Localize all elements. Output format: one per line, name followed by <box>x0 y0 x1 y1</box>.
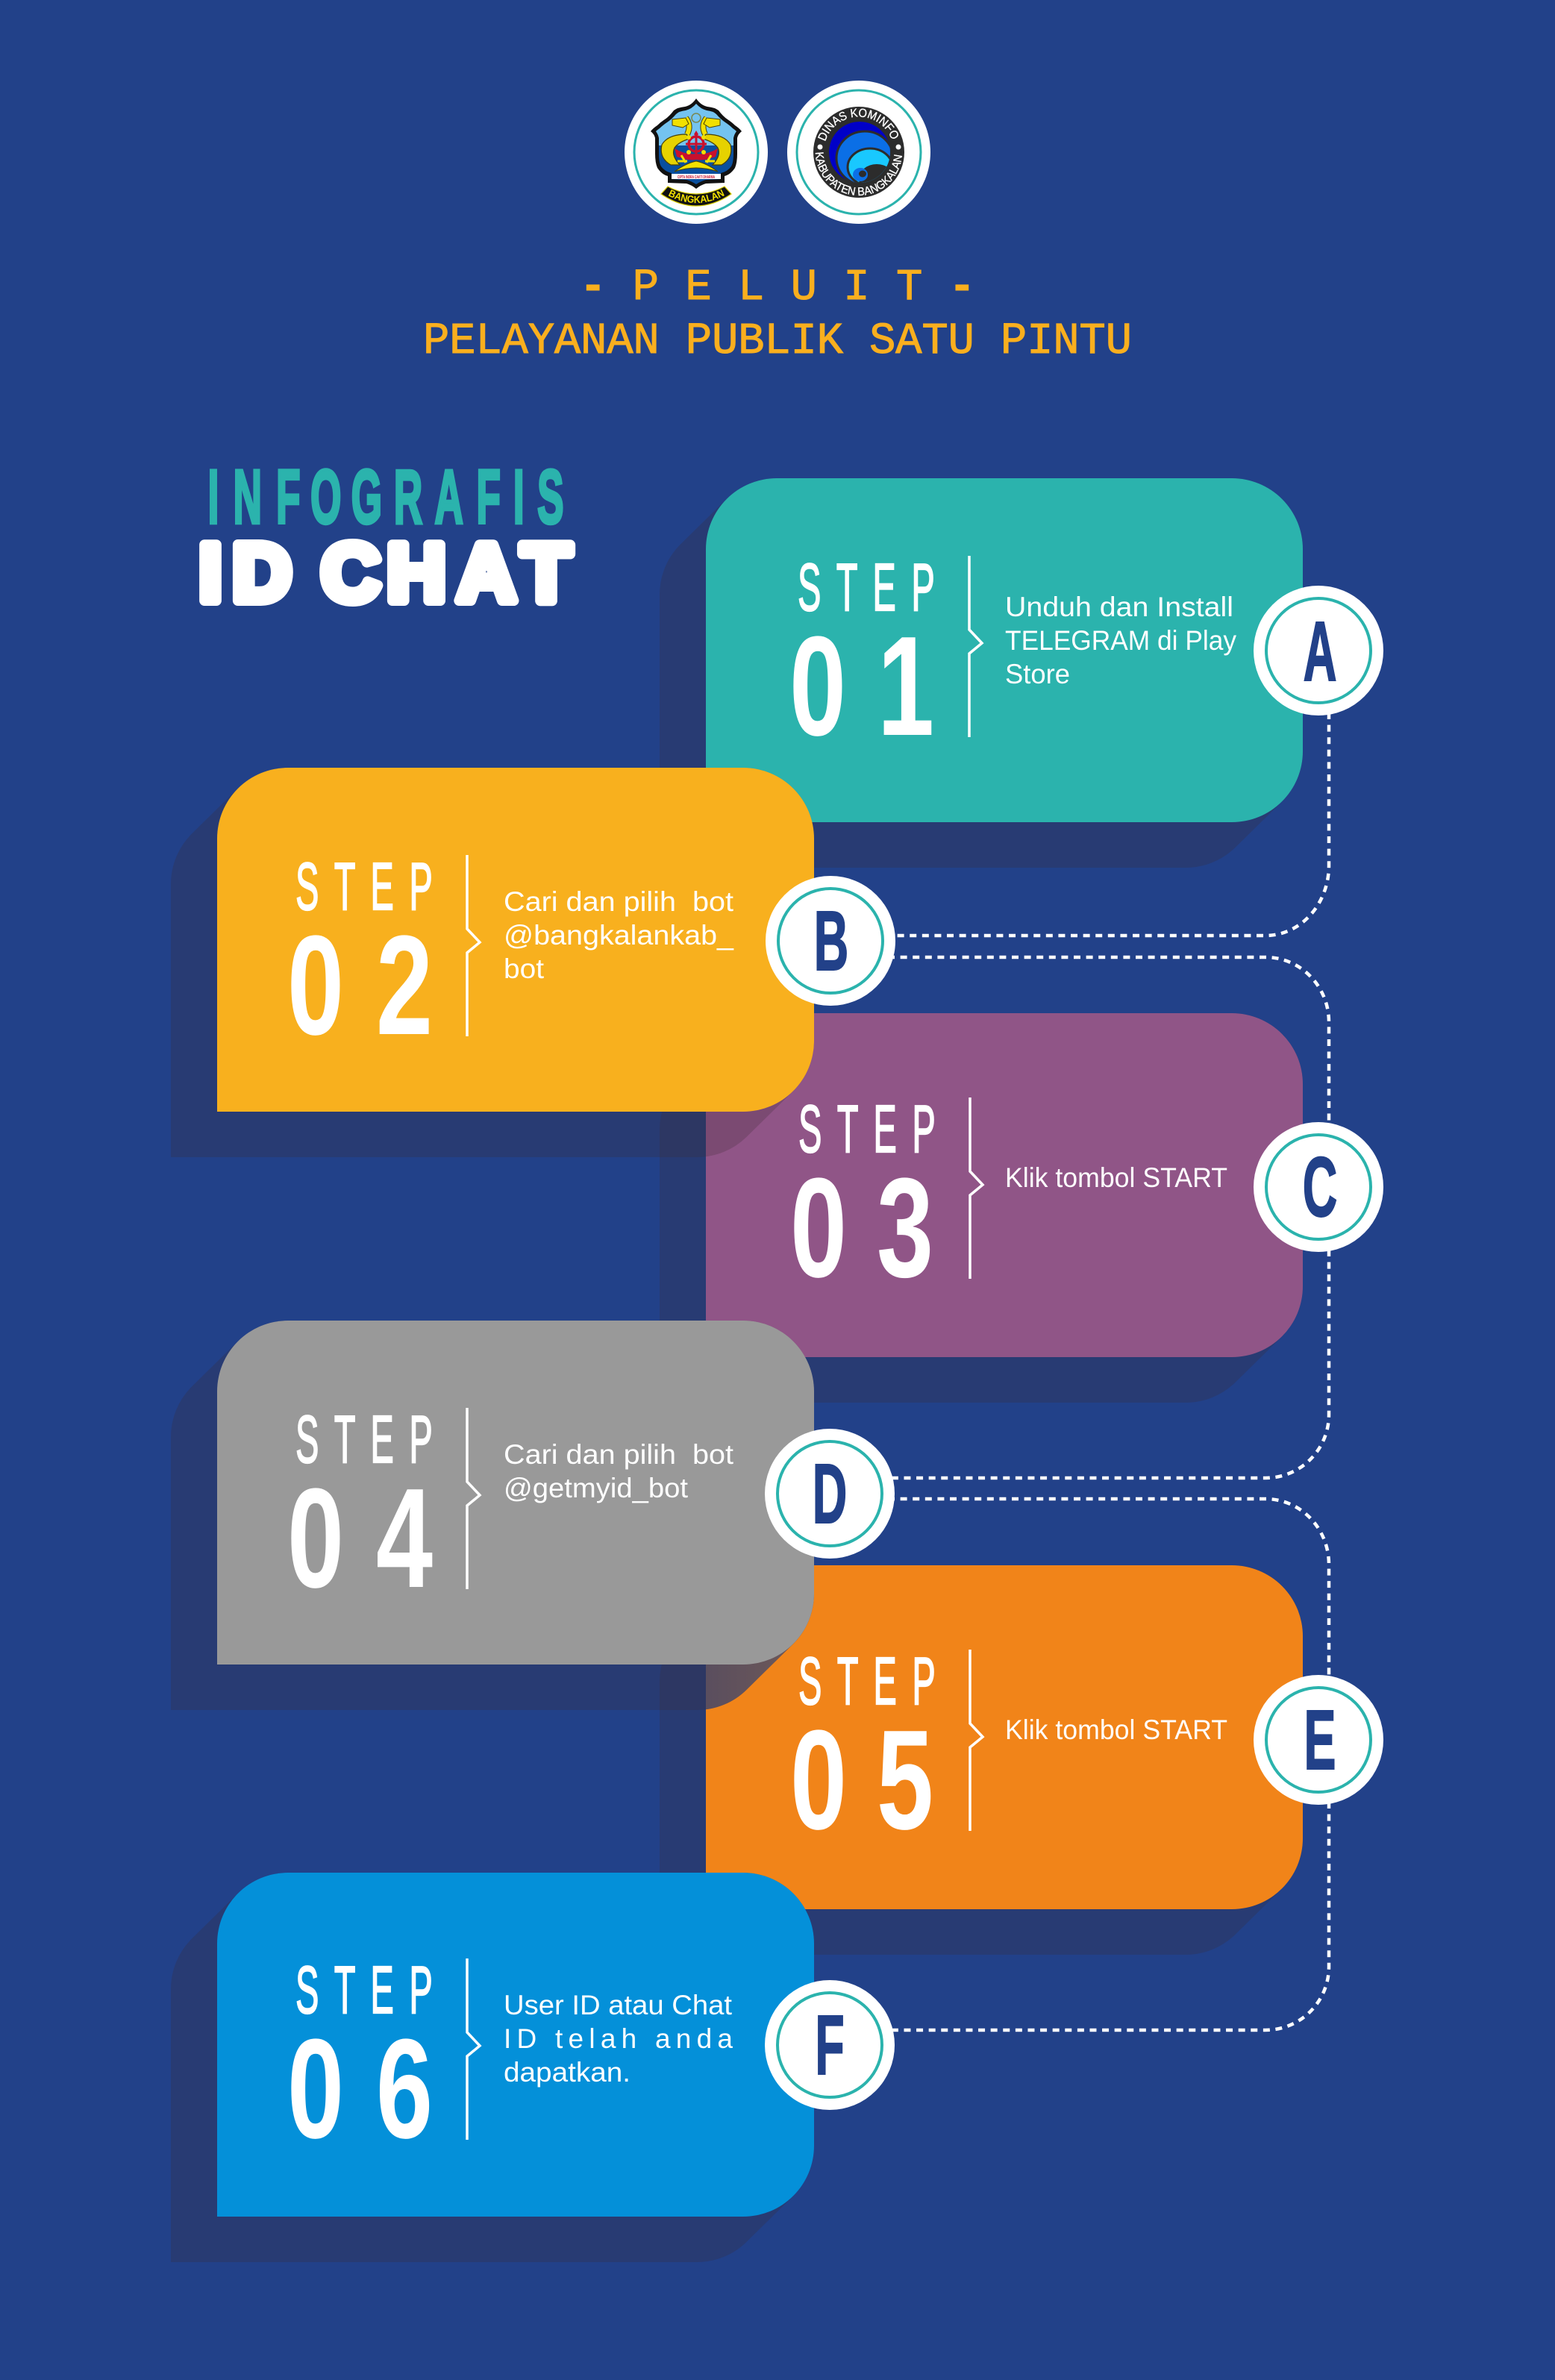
word STEP: STEP <box>295 1953 433 2028</box>
card shadow 04 <box>171 1321 814 1710</box>
digit 0: 0 <box>287 1459 344 1618</box>
card 03 <box>706 1013 1303 1357</box>
panel: step 03 <box>660 1013 1303 1403</box>
shadow over orange card <box>706 1595 814 1710</box>
badge A <box>1254 586 1383 715</box>
divider with chevron <box>970 1650 983 1831</box>
motto: CIPTA INDRA CAKTI DHARMA <box>678 175 715 180</box>
digit 4: 4 <box>376 1459 433 1618</box>
step label 06 <box>287 1953 480 2168</box>
card shadow 05 <box>660 1565 1303 1955</box>
description 02: bot <box>504 953 545 984</box>
divider with chevron <box>467 1958 480 2140</box>
description 04 <box>504 1439 734 1503</box>
digit 0: 0 <box>287 2010 344 2168</box>
description 05: Klik tombol START <box>1005 1714 1227 1745</box>
panel: step 05 <box>660 1565 1303 1955</box>
badge A: A <box>1304 604 1336 699</box>
description 01: Unduh dan Install <box>1005 592 1233 622</box>
digit 6: 6 <box>376 2010 433 2168</box>
arrow: dashed connector B to C <box>888 957 1329 1127</box>
word STEP: STEP <box>295 850 433 924</box>
description 04: Cari dan pilih bot <box>504 1439 734 1470</box>
card shadow 06 <box>171 1873 814 2262</box>
step label 05 <box>790 1644 983 1859</box>
logo: Dinas Kominfo: KABUPATEN BANGKALAN <box>815 152 903 195</box>
right serpent <box>703 118 731 165</box>
left serpent <box>661 118 689 165</box>
description 04: @getmyid_bot <box>504 1473 689 1503</box>
card 02 <box>217 768 814 1112</box>
description 02: Cari dan pilih bot <box>504 886 734 917</box>
ribbon text: BANGKALAN <box>669 190 725 203</box>
word STEP: STEP <box>798 551 935 625</box>
boat <box>675 161 718 172</box>
red bow and wheel <box>675 131 718 160</box>
step label 02 <box>287 850 480 1065</box>
title: ID Chat: ID CHAT <box>199 527 571 619</box>
logo: Kabupaten Bangkalan emblem <box>625 81 768 224</box>
word STEP: STEP <box>295 1403 433 1477</box>
card 01 <box>706 478 1303 822</box>
description 02 <box>504 886 734 984</box>
card 04 <box>217 1321 814 1665</box>
heading: PELUIT: - P E L U I T - <box>580 263 975 313</box>
arrow: dashed connector D to E <box>888 1499 1329 1679</box>
card 05 <box>706 1565 1303 1909</box>
divider with chevron <box>467 855 480 1036</box>
digit 2: 2 <box>376 906 433 1065</box>
arrow: dashed connector C to D <box>888 1250 1329 1478</box>
panel: step 06 <box>171 1873 814 2262</box>
card 06 <box>217 1873 814 2217</box>
digit 0: 0 <box>287 906 344 1065</box>
step label 03 <box>790 1092 983 1307</box>
description 03: Klik tombol START <box>1005 1162 1227 1193</box>
badge B <box>766 876 895 1006</box>
word STEP: STEP <box>798 1092 936 1167</box>
badge E <box>1254 1675 1383 1805</box>
digit 0: 0 <box>789 607 846 765</box>
panel: step 02 <box>171 768 814 1157</box>
card shadow 02 <box>171 768 814 1157</box>
badge E: E <box>1304 1694 1336 1788</box>
digit 0: 0 <box>790 1701 847 1859</box>
divider with chevron <box>969 556 982 737</box>
badge C <box>1254 1122 1383 1252</box>
title: Infografis: INFOGRAFIS <box>208 454 564 540</box>
badge D <box>765 1429 895 1559</box>
description 01 <box>1005 592 1236 689</box>
heading: Pelayanan Publik Satu Pintu: PELAYANAN PUBLIK SATU PINTU <box>423 316 1132 366</box>
arrow: dashed connector A to B <box>888 713 1329 936</box>
badge C: C <box>1303 1141 1337 1235</box>
description 02: @bangkalankab_ <box>504 920 733 951</box>
description 01: TELEGRAM di Play <box>1005 625 1236 656</box>
step label 01 <box>789 551 982 765</box>
divider with chevron <box>970 1097 983 1279</box>
card shadow 01 <box>660 478 1303 868</box>
description 01: Store <box>1005 659 1070 689</box>
card shadow 03 <box>660 1013 1303 1403</box>
word STEP: STEP <box>798 1644 936 1719</box>
digit 0: 0 <box>790 1149 847 1307</box>
panel: step 01 <box>660 478 1303 868</box>
ribbon <box>661 187 731 206</box>
badge B: B <box>814 895 848 989</box>
digit 3: 3 <box>877 1149 933 1307</box>
badge D: D <box>813 1447 847 1541</box>
digit 5: 5 <box>877 1701 933 1859</box>
logo: Dinas Kominfo <box>787 81 930 224</box>
step label 04 <box>287 1403 480 1618</box>
panel: step 04 <box>171 1321 814 1710</box>
description 06 <box>504 1990 733 2088</box>
badge F: F <box>815 1999 845 2093</box>
description 06: dapatkan. <box>504 2057 631 2088</box>
description 06: ID telah anda <box>504 2023 733 2054</box>
divider with chevron <box>467 1408 480 1589</box>
arrow: dashed connector E to F <box>888 1802 1329 2030</box>
badge F <box>765 1980 895 2110</box>
description 06: User ID atau Chat <box>504 1990 733 2020</box>
digit 1: 1 <box>877 607 934 765</box>
logo: Dinas Kominfo: DINAS KOMINFO <box>818 108 898 141</box>
